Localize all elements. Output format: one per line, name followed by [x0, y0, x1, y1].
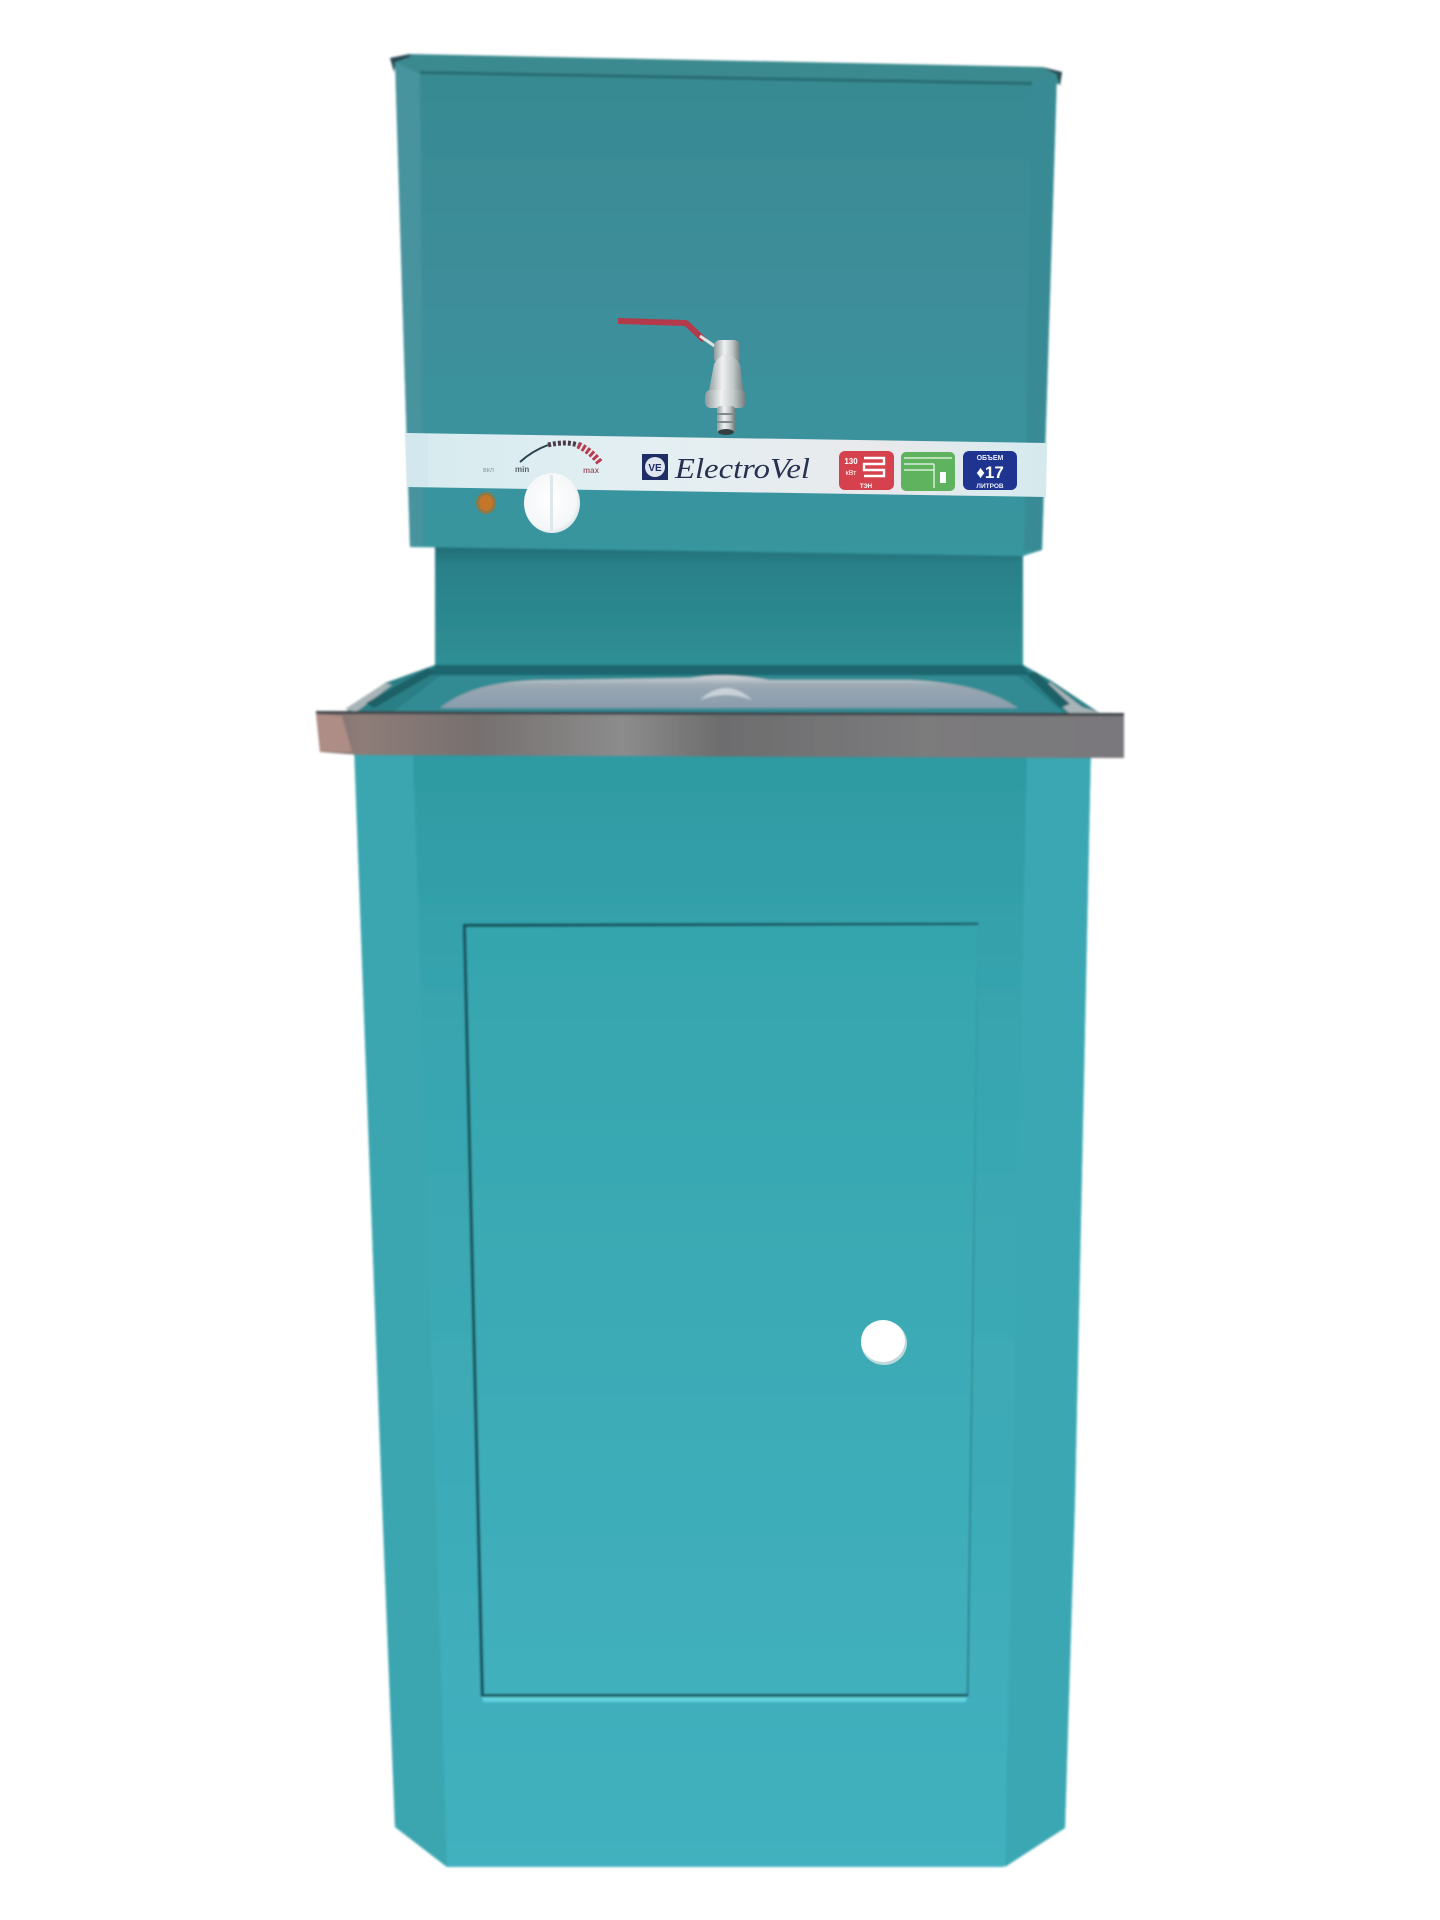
counter metal edges	[345, 683, 392, 712]
door knob	[861, 1320, 907, 1365]
brand name: ElectroVel	[674, 454, 810, 485]
badge: power: ТЭН	[860, 484, 872, 490]
scale labels: вкл	[483, 467, 494, 474]
cabinet door	[463, 923, 978, 1702]
control label strip: min	[515, 465, 529, 474]
badge: power: кВт	[846, 470, 857, 477]
badge: power	[839, 451, 894, 490]
thermostat knob	[524, 473, 580, 533]
red lever handle	[618, 321, 704, 340]
indicator lamp	[476, 492, 496, 514]
lower cabinet	[354, 745, 1091, 1867]
control label strip	[406, 433, 1047, 497]
cabinet left side facet	[354, 745, 447, 1867]
cabinet right side facet	[1005, 745, 1091, 1867]
badge: power: 130	[844, 457, 858, 466]
brand logo mark: VE	[648, 463, 662, 474]
neck panel	[435, 535, 1023, 680]
control label strip: max	[583, 466, 600, 475]
water tank	[390, 54, 1062, 556]
faucet	[618, 321, 746, 435]
badge: volume: ♦17	[976, 463, 1004, 482]
badge: green spec	[901, 452, 955, 491]
badge: volume: ЛИТРОВ	[976, 483, 1004, 490]
tank lid	[390, 54, 1062, 84]
badge: volume: ОБЪЕМ	[977, 455, 1004, 462]
stainless rim	[316, 712, 1124, 758]
brand logo mark	[642, 454, 668, 480]
badge: volume	[963, 451, 1017, 490]
basin bowl	[440, 675, 1018, 708]
sink counter and basin	[316, 665, 1124, 758]
temperature scale	[520, 443, 600, 463]
